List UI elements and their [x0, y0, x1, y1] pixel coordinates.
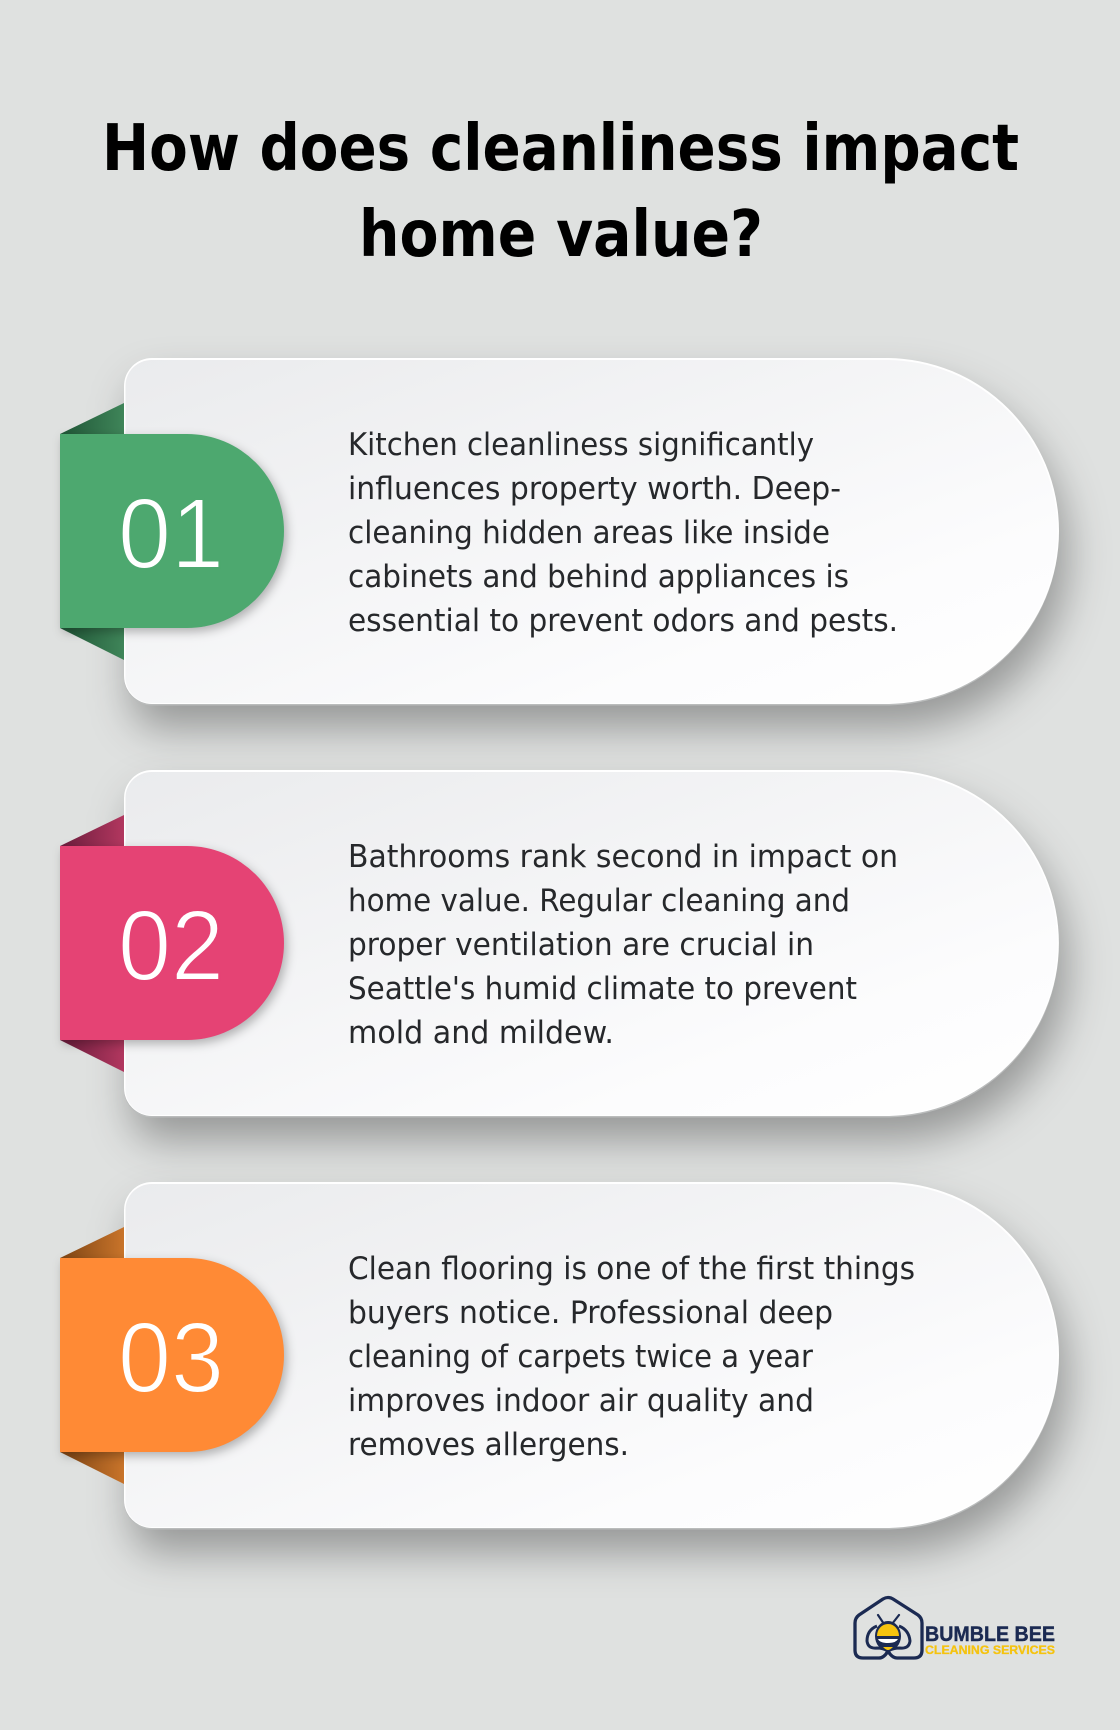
number badge 03: 03 [118, 1302, 224, 1414]
number badge 02: 02 [118, 890, 224, 1002]
wings [867, 1626, 910, 1651]
card shadow 1 [132, 382, 1067, 728]
number badge 02 [60, 846, 284, 1040]
text: flooring: Clean flooring is one of the first things [348, 1251, 915, 1287]
text: kitchen: essential to prevent odors and pests. [348, 603, 898, 639]
text: kitchen: influences property worth. Deep- [348, 471, 841, 507]
text: kitchen: cabinets and behind appliances is [348, 559, 849, 595]
logo wordmark: BUMBLE BEE [925, 1622, 1055, 1646]
card 2 [124, 770, 1059, 1118]
house outline [855, 1598, 922, 1658]
badge shadow 2 [63, 850, 287, 1044]
number badge 03 [60, 1258, 284, 1452]
card shadow 2 [132, 794, 1067, 1140]
title: How does cleanliness impact [102, 112, 1019, 186]
panel: step 3 flooring [60, 1182, 1067, 1552]
antennae [878, 1615, 899, 1624]
icon: house with bee [855, 1598, 922, 1658]
card shadow 3 [132, 1206, 1067, 1552]
text: flooring: removes allergens. [348, 1427, 629, 1463]
badge shadow 1 [63, 438, 287, 632]
text: bathrooms: mold and mildew. [348, 1015, 614, 1051]
text: bathrooms [348, 839, 898, 1051]
ribbon folds 2 [60, 815, 124, 1072]
panel: step 1 kitchen [60, 358, 1067, 728]
ribbon folds 1 [60, 403, 124, 660]
bee body [875, 1621, 901, 1651]
text: flooring: cleaning of carpets twice a year [348, 1339, 813, 1375]
text: flooring: improves indoor air quality and [348, 1383, 814, 1419]
text: kitchen [348, 427, 898, 639]
card 3 [124, 1182, 1059, 1530]
card 1 [124, 358, 1059, 706]
logo: Bumble Bee Cleaning Services [855, 1598, 1055, 1658]
text: bathrooms: home value. Regular cleaning and [348, 883, 850, 919]
number badge 01: 01 [118, 478, 224, 590]
text: kitchen: Kitchen cleanliness significantly [348, 427, 814, 463]
panel: step 2 bathrooms [60, 770, 1067, 1140]
title [102, 112, 1019, 272]
text: bathrooms: Seattle's humid climate to prevent [348, 971, 857, 1007]
text: kitchen: cleaning hidden areas like inside [348, 515, 830, 551]
text: bathrooms: Bathrooms rank second in impact on [348, 839, 898, 875]
number badge 01 [60, 434, 284, 628]
text: flooring [348, 1251, 915, 1463]
title: home value? [359, 198, 763, 272]
ribbon folds 3 [60, 1227, 124, 1484]
logo wordmark [925, 1622, 1055, 1657]
badge shadow 3 [63, 1262, 287, 1456]
text: bathrooms: proper ventilation are crucial in [348, 927, 814, 963]
text: flooring: buyers notice. Professional deep [348, 1295, 833, 1331]
logo wordmark: CLEANING SERVICES [925, 1643, 1055, 1657]
